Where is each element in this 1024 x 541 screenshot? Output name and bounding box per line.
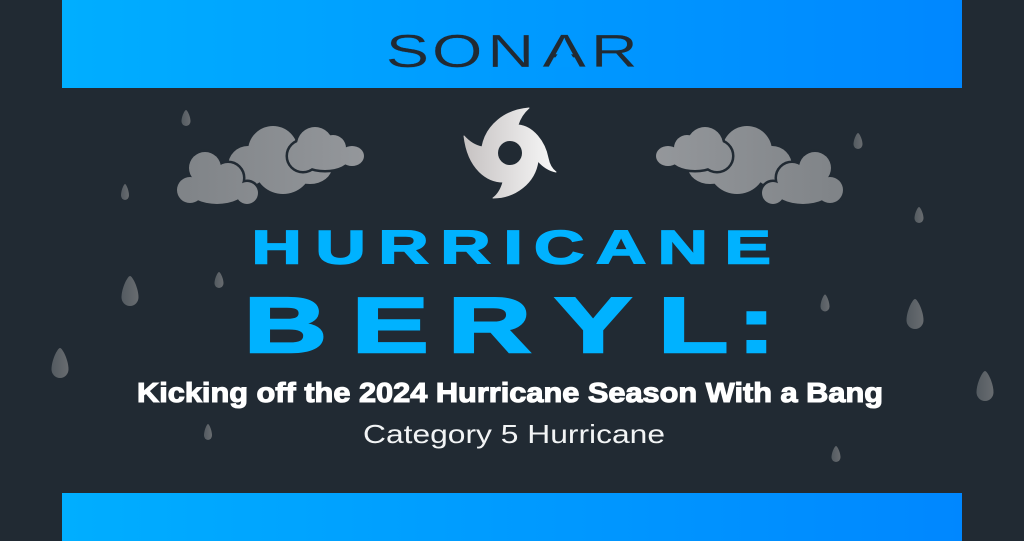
title: HURRICANE: HURRICANE: [251, 221, 771, 274]
bottom blue banner: [62, 493, 962, 541]
category label: Category 5 Hurricane: [363, 419, 665, 449]
icon: hurricane symbol: [464, 108, 556, 198]
rain drops: [52, 110, 994, 462]
title: BERYL:: BERYL:: [244, 281, 775, 369]
icon: right cloud: [656, 126, 843, 204]
subtitle: Kicking off the 2024 Hurricane Season With a Bang: [137, 377, 883, 408]
top blue banner: [62, 0, 962, 88]
icon: left cloud: [177, 126, 364, 204]
logo: SONAR: SONAR: [386, 25, 638, 77]
